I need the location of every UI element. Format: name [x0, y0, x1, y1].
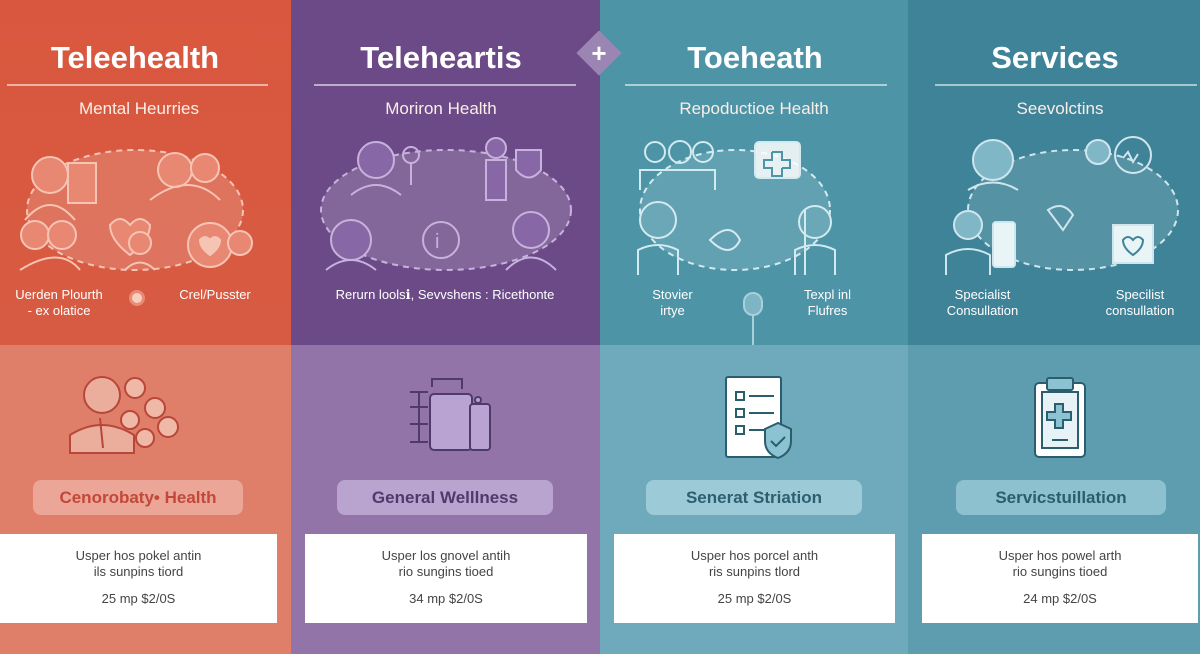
text: consullation	[1106, 303, 1174, 318]
text box: col3	[614, 534, 895, 623]
title: col4: Services	[991, 40, 1119, 75]
icon: col1 drop	[129, 290, 145, 306]
pill: col3	[646, 480, 862, 515]
text box: col2	[305, 534, 587, 623]
icon: center diamond plus	[576, 30, 622, 76]
labels: col3: irtye	[660, 303, 685, 318]
text box: col1: ils sunpins tiord	[94, 564, 183, 579]
subtitle: col4: Seevolctins	[1017, 99, 1103, 118]
text box: col4: Usper hos powel arth	[999, 548, 1121, 563]
icon: col3 checklist shield	[725, 376, 792, 459]
text box: col3: ris sunpins tlord	[709, 564, 800, 579]
text: Crel/Pusster	[179, 287, 251, 302]
labels: col4: Specialist	[955, 287, 1010, 302]
subtitle: col3: Repoductioe Health	[679, 99, 829, 118]
icon: col2 machine	[410, 378, 491, 451]
pill: col4: Servicstuillation	[995, 488, 1127, 507]
text: Texpl inl	[804, 287, 851, 302]
icon: col4 clipboard	[1034, 377, 1086, 458]
pill: col1	[33, 480, 243, 515]
text box: col3: Usper hos porcel anth	[691, 548, 818, 563]
text box: col4	[922, 534, 1198, 623]
text box: col1	[0, 534, 277, 623]
icon: col1 person with bubbles	[69, 376, 179, 454]
labels: col4	[947, 287, 1018, 318]
text box: col2: Usper los gnovel antih	[382, 548, 510, 563]
text box: col1: 25 mp $2/0S	[102, 591, 175, 606]
panel: col2 top	[291, 0, 600, 345]
text box: col2: rio sungins tioed	[399, 564, 493, 579]
panel: col3 top	[600, 0, 908, 345]
labels: col3	[652, 287, 693, 318]
text box: col4: 24 mp $2/0S	[1023, 591, 1097, 606]
labels: col1: Uerden Plourth	[15, 287, 103, 302]
illustration: col2 people: i	[435, 231, 439, 253]
text box: col3: 25 mp $2/0S	[718, 591, 791, 606]
labels: col3: Stovier	[652, 287, 693, 302]
subtitle: col2: Moriron Health	[385, 99, 497, 118]
illustration: col2 people	[320, 137, 572, 271]
illustration: col1 people	[20, 149, 253, 271]
icon: col3 lock	[743, 292, 763, 316]
panel: col4 bottom	[908, 345, 1200, 654]
labels: col1: - ex olatice	[28, 303, 90, 318]
panel: col1 top	[0, 0, 291, 345]
panel: col3 bottom	[600, 345, 908, 654]
text: +	[591, 38, 607, 68]
pill: col2: General Welllness	[372, 488, 518, 507]
pill: col4	[956, 480, 1166, 515]
title: col3: Toeheath	[687, 40, 823, 75]
illustration: col3 people	[637, 140, 836, 275]
text box: col1: Usper hos pokel antin	[76, 548, 201, 563]
pill: col1: Cenorobaty• Health	[59, 488, 217, 507]
title: col2: Teleheartis	[360, 40, 522, 75]
text box: col2: 34 mp $2/0S	[409, 591, 483, 606]
text: Flufres	[808, 303, 847, 318]
pill: col2	[337, 480, 553, 515]
illustration: col4 people	[945, 136, 1179, 275]
labels: col2: Rerurn loolsℹ, Sevvshens : Ricethonte	[336, 287, 554, 302]
panel: col4 top	[908, 0, 1200, 345]
pill: col3: Senerat Striation	[686, 488, 822, 507]
text: Specilist	[1116, 287, 1164, 302]
panel: col1 bottom	[0, 345, 291, 654]
labels: col1	[15, 287, 103, 318]
labels: col4: Consullation	[947, 303, 1018, 318]
title: col1: Teleehealth	[51, 40, 219, 75]
panel: col2 bottom	[291, 345, 600, 654]
text box: col4: rio sungins tioed	[1013, 564, 1107, 579]
subtitle: col1: Mental Heurries	[79, 99, 199, 118]
